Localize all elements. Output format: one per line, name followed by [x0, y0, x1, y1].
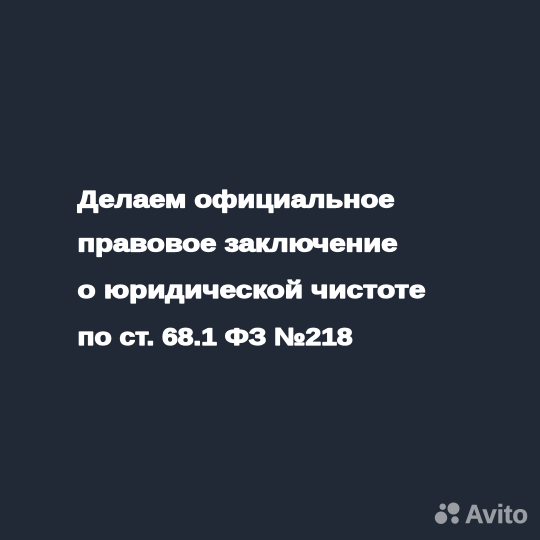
heading text block: Делаем официальное — [78, 186, 394, 214]
heading text block: правовое заключение — [78, 230, 398, 258]
logo: Avito watermark — [435, 499, 528, 529]
heading text block: о юридической чистоте — [78, 277, 425, 304]
heading text block: по ст. 68.1 ФЗ №218 — [78, 324, 352, 351]
heading text block — [78, 186, 425, 351]
logo: Avito watermark: Avito — [465, 499, 528, 529]
